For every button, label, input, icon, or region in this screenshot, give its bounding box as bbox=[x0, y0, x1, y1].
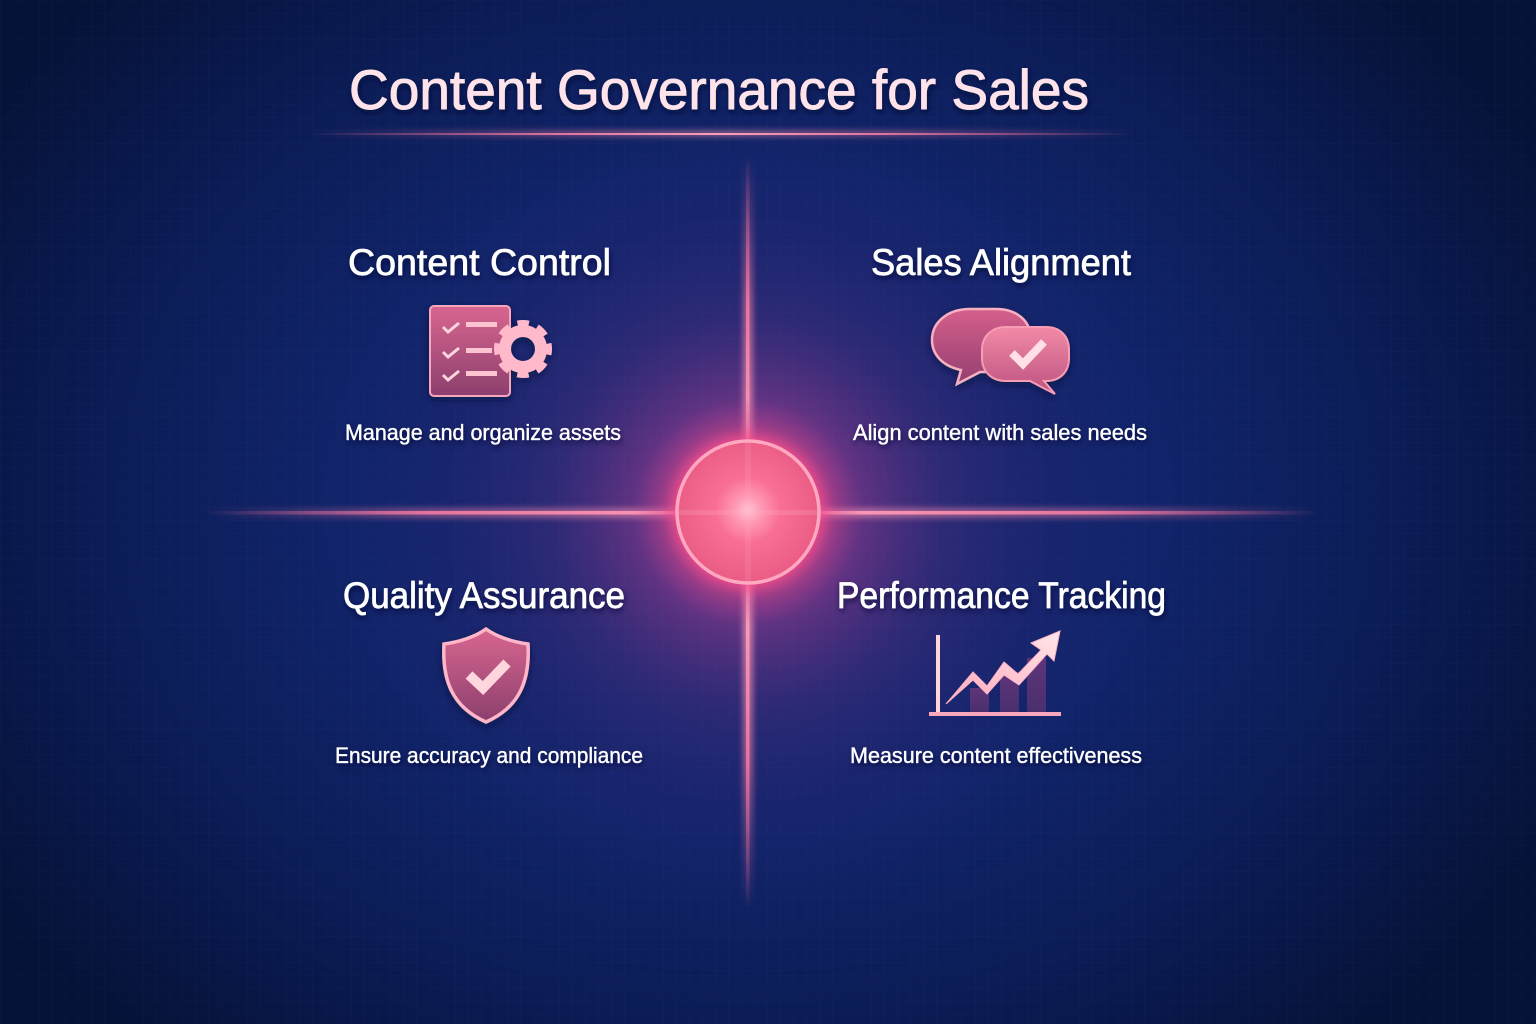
heading: sales alignment: Sales Alignment bbox=[871, 242, 1132, 283]
panel: performance tracking bbox=[837, 575, 1166, 768]
panel: content control bbox=[345, 242, 621, 445]
icon: checklist with gear bbox=[430, 306, 548, 396]
icon: chat bubbles with check bbox=[932, 309, 1069, 394]
icon: shield with check bbox=[444, 629, 528, 722]
panel: sales alignment bbox=[853, 242, 1147, 445]
title: Content Governance for Sales bbox=[349, 58, 1089, 121]
title underline bbox=[305, 130, 1135, 137]
description: quality assurance: Ensure accuracy and compliance bbox=[335, 743, 643, 768]
icon: growth chart bbox=[929, 631, 1061, 716]
cross axes bbox=[205, 155, 1320, 910]
panel: quality assurance bbox=[335, 575, 643, 768]
heading: quality assurance: Quality Assurance bbox=[343, 575, 625, 616]
heading: content control: Content Control bbox=[348, 242, 611, 283]
description: performance tracking: Measure content effectiveness bbox=[850, 743, 1142, 768]
heading: performance tracking: Performance Tracking bbox=[837, 575, 1166, 616]
description: sales alignment: Align content with sales needs bbox=[853, 420, 1147, 445]
central glowing orb bbox=[633, 397, 863, 627]
description: content control: Manage and organize assets bbox=[345, 420, 621, 445]
